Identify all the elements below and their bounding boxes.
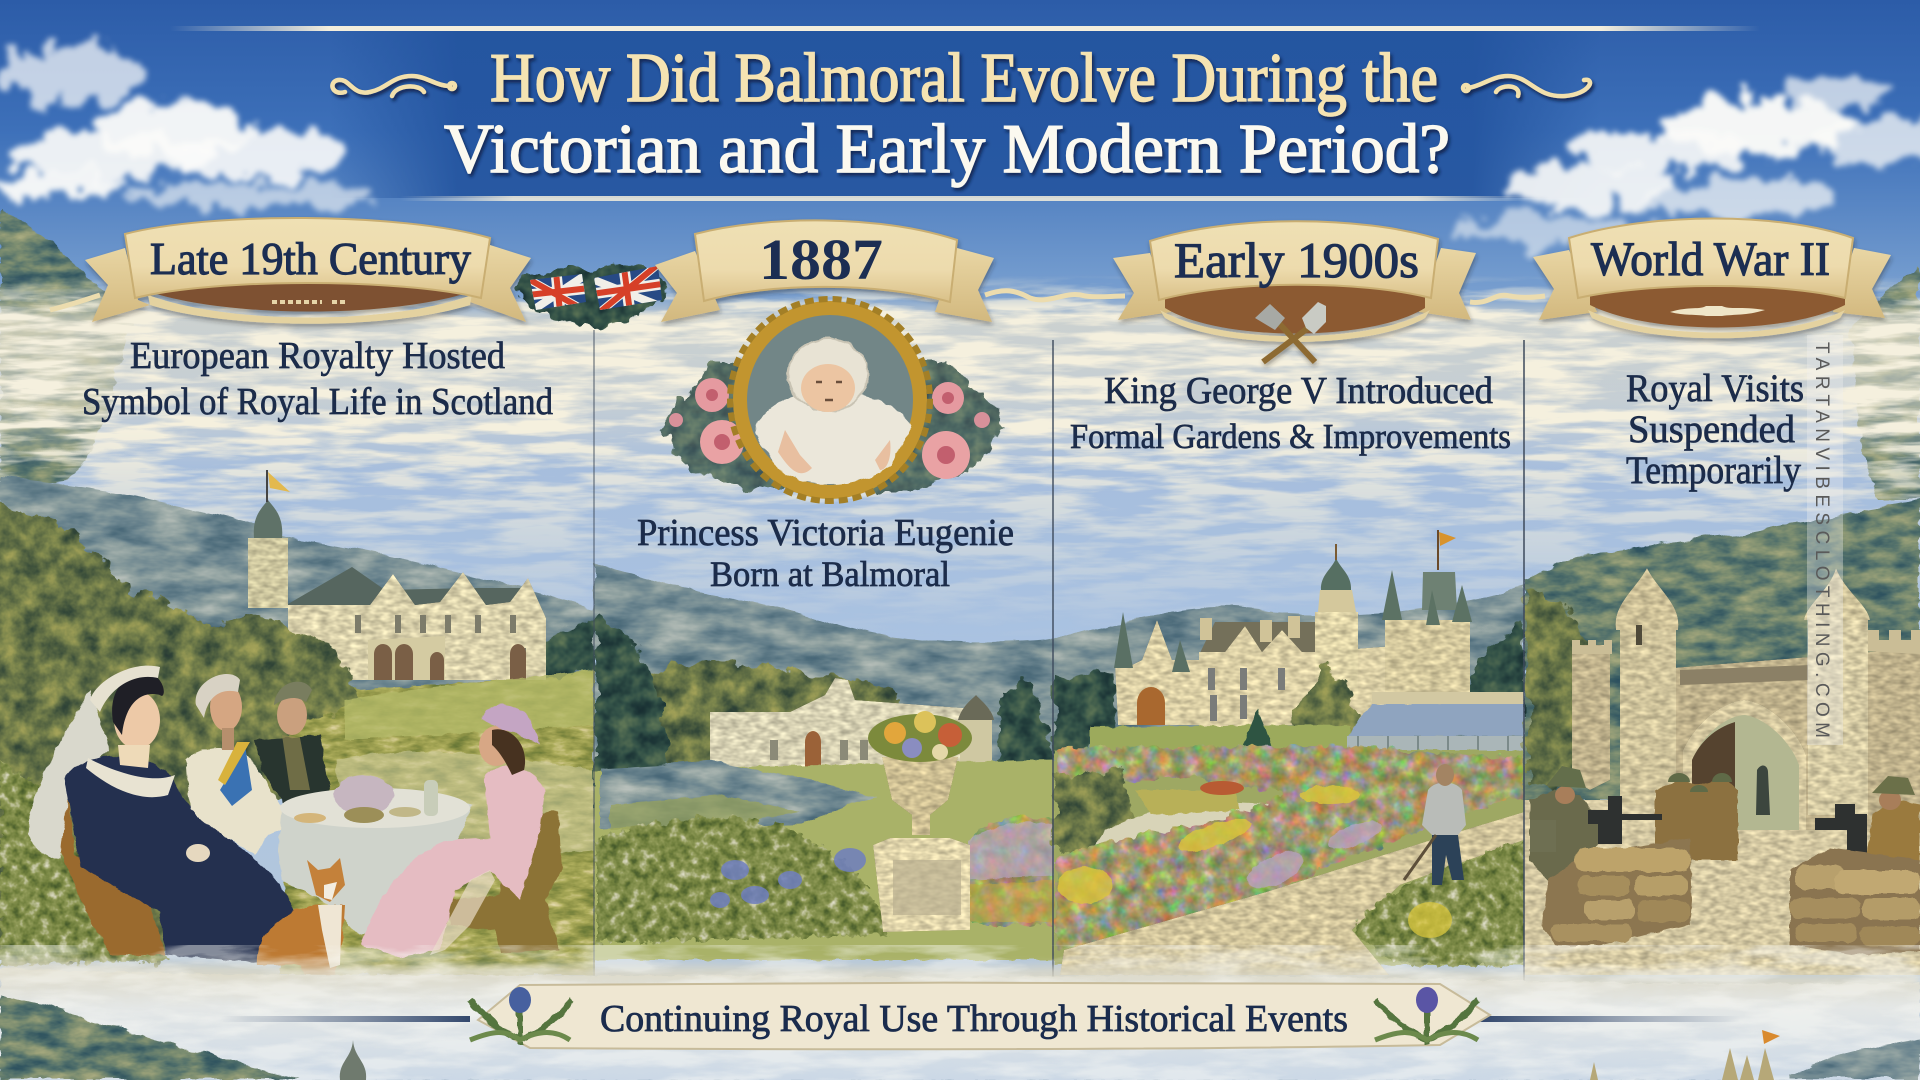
line 2: Formal Gardens & Improvements	[1070, 417, 1511, 456]
panel: 1887 scene	[594, 562, 1060, 960]
mottled shrubs	[1054, 770, 1140, 855]
hills	[1524, 500, 1920, 800]
dress	[361, 767, 545, 957]
line 3: Temporarily	[1626, 449, 1801, 492]
gravel main path	[1060, 812, 1524, 975]
neck	[118, 745, 150, 768]
central tower	[1315, 612, 1358, 700]
line 1: European Royalty Hosted	[130, 335, 505, 377]
tails	[1113, 248, 1476, 320]
entrance arches	[368, 636, 445, 680]
lawn	[594, 760, 1054, 960]
title	[332, 40, 1590, 188]
lavender beds	[600, 762, 880, 830]
watermark	[1807, 335, 1843, 745]
baby dress	[755, 390, 912, 484]
baby hands	[778, 430, 891, 473]
text: World War II	[1591, 233, 1830, 286]
back soldiers	[1655, 778, 1738, 860]
brown plaque	[148, 295, 472, 324]
seated woman in pink	[361, 704, 545, 957]
head	[114, 691, 160, 749]
tails	[655, 248, 994, 322]
back flower rows	[1058, 745, 1524, 795]
lower castle turrets	[340, 1030, 1780, 1080]
bonnet	[90, 666, 160, 712]
flower bed right	[968, 817, 1054, 925]
battlements	[1572, 630, 1920, 654]
text: 1887	[759, 227, 883, 292]
lower left flowers	[0, 760, 170, 965]
main building	[288, 572, 546, 680]
dress	[64, 756, 300, 963]
connecting ribbons between timeline banners	[50, 291, 1545, 310]
mid trees	[640, 662, 900, 770]
title line 1: How Did Balmoral Evolve During the	[490, 40, 1438, 117]
panel: early 1900s scene	[1054, 530, 1524, 975]
meadow	[280, 668, 600, 975]
dark trees behind castle	[546, 620, 595, 680]
small conifer	[1240, 708, 1274, 752]
dark doorway	[1692, 722, 1735, 830]
tower right	[1804, 568, 1870, 815]
hills	[1054, 585, 1524, 760]
flower meadow	[335, 751, 600, 860]
bed greens	[610, 795, 800, 830]
queen	[27, 666, 300, 963]
foggy bottom band	[0, 945, 1920, 1080]
urn flowers	[868, 711, 972, 762]
lace collar	[86, 758, 175, 797]
banner: Late 19th Century	[85, 218, 531, 324]
tails	[1533, 248, 1891, 320]
bright opening	[1692, 715, 1799, 830]
main roofs	[1199, 622, 1315, 660]
wall shadow band	[1680, 665, 1810, 685]
line 2: Suspended	[1628, 408, 1795, 451]
tower	[248, 470, 290, 608]
flower bed left	[596, 818, 888, 942]
distant hills	[594, 562, 1060, 780]
clouds upper left	[0, 45, 380, 207]
text: Early 1900s	[1174, 232, 1419, 288]
helmets	[1668, 773, 1732, 792]
icon: winged badge	[1670, 306, 1765, 316]
icon: crossed Union flags with wreath	[514, 264, 670, 330]
baby face	[801, 364, 855, 412]
queen's chair	[60, 800, 166, 956]
flower bouquet	[334, 775, 394, 815]
windows	[355, 615, 526, 653]
icon: thistle left	[470, 987, 572, 1045]
flourish right	[1463, 76, 1590, 96]
ornament	[272, 300, 345, 304]
main range	[1199, 626, 1470, 728]
line 1: Princess Victoria Eugenie	[637, 512, 1014, 554]
text: late 19th century	[82, 335, 553, 423]
main flower border	[1056, 760, 1524, 950]
trees behind	[1054, 670, 1115, 760]
door	[1137, 687, 1165, 725]
head	[479, 726, 513, 766]
roofs	[288, 567, 520, 605]
title line 2: Victorian and Early Modern Period?	[444, 111, 1450, 188]
windows	[1208, 668, 1285, 721]
clouds upper right	[1460, 78, 1920, 246]
distant forested hills at the left and right edges	[0, 210, 1920, 500]
shirt	[1422, 782, 1466, 835]
line 1: Royal Visits	[1626, 367, 1804, 410]
line 1: King George V Introduced	[1104, 370, 1493, 412]
foreground trees	[206, 614, 358, 720]
arch surround	[1683, 700, 1806, 830]
plaque border	[1588, 310, 1845, 338]
cream haze layer behind descriptions	[0, 295, 1920, 470]
curtain wall	[1572, 645, 1920, 830]
gate arch	[1683, 700, 1806, 830]
panel: World War II scene	[1524, 500, 1920, 975]
conifer in front	[1285, 660, 1362, 750]
far figure	[1756, 766, 1770, 815]
banner: World War II	[1533, 218, 1891, 338]
side rules	[220, 1016, 470, 1022]
streaky cream cloud band	[0, 278, 1920, 614]
watermark: TARTANVIBESCLOTHING.COM	[1811, 342, 1832, 738]
small bed	[1135, 790, 1240, 815]
medallion: baby portrait	[660, 299, 1005, 501]
left machine gun	[1588, 796, 1662, 844]
front left soldier	[1530, 766, 1606, 895]
icon: thistle right	[1375, 987, 1478, 1045]
header rules	[170, 26, 1760, 201]
flag 1	[525, 270, 590, 315]
sandbags left	[1542, 838, 1692, 945]
plaque border	[1160, 310, 1430, 342]
background woodland	[0, 502, 290, 968]
lawn	[1090, 725, 1350, 752]
right tower group	[1385, 620, 1470, 700]
baby bonnet	[788, 339, 868, 411]
banner: Early 1900s	[1113, 221, 1476, 362]
castle	[248, 470, 546, 680]
right soldier	[1866, 776, 1920, 860]
chimneys	[1200, 616, 1300, 642]
pedestal	[873, 838, 970, 932]
banner: 1887	[655, 220, 994, 322]
main band	[125, 218, 490, 298]
text: World War II	[1626, 367, 1804, 492]
lower hills	[0, 995, 1920, 1080]
red bed	[1200, 781, 1244, 795]
bright lawn	[345, 668, 600, 740]
hat	[481, 704, 540, 745]
garden ground	[1054, 750, 1524, 965]
castle	[1114, 530, 1472, 728]
text: Late 19th Century	[150, 233, 471, 284]
baby eyes and mouth	[816, 382, 842, 400]
flourish left	[332, 76, 455, 96]
footer text: Continuing Royal Use Through Historical Events	[600, 998, 1348, 1040]
officer in black	[254, 682, 332, 805]
right machine gun	[1815, 804, 1867, 854]
line 2: Born at Balmoral	[710, 554, 950, 594]
distant palace	[710, 678, 994, 770]
water jug	[424, 780, 438, 816]
footer banner	[220, 983, 1740, 1049]
urn	[868, 711, 972, 835]
gold frame	[740, 308, 920, 492]
woman's chair	[447, 810, 562, 953]
corgi	[257, 858, 345, 975]
text: early 1900s	[1070, 370, 1511, 456]
distant hills	[0, 476, 595, 691]
main band	[1150, 221, 1438, 300]
rake	[1404, 835, 1436, 880]
veil	[27, 690, 110, 860]
sandbags right	[1790, 848, 1920, 955]
banner body	[478, 983, 1490, 1049]
brown plaque	[1165, 280, 1425, 334]
conifers near turret	[1000, 680, 1052, 770]
tower left	[1616, 568, 1678, 805]
tree on left	[1528, 590, 1602, 790]
wreath	[514, 265, 670, 330]
icon: crossed hammer and shovel	[1255, 302, 1326, 362]
spires	[1114, 612, 1190, 672]
text: 1887	[637, 512, 1014, 594]
dark conifers	[596, 610, 672, 810]
tails	[85, 245, 531, 322]
main band	[1569, 218, 1853, 298]
line 2: Symbol of Royal Life in Scotland	[82, 381, 553, 423]
greenhouse	[1346, 692, 1524, 758]
brown plaque	[1590, 280, 1845, 328]
officer in white	[186, 674, 290, 855]
flag 2	[590, 264, 665, 314]
hand	[186, 844, 210, 862]
roses and foliage	[660, 360, 1005, 490]
gardener	[1404, 764, 1466, 885]
lilac patches in border	[1242, 816, 1385, 895]
table	[278, 775, 472, 935]
ground / road	[1524, 800, 1920, 975]
main band	[695, 220, 957, 302]
gravel paths	[1080, 800, 1300, 868]
right flower clump	[1352, 840, 1524, 965]
trousers	[1432, 835, 1464, 885]
head	[1436, 764, 1454, 786]
blue blooms	[710, 848, 866, 908]
gatehouse	[1115, 620, 1199, 725]
panel: late 19th century scene	[0, 470, 600, 975]
gold patches in border	[1057, 786, 1360, 903]
panel dividers	[594, 330, 1524, 990]
